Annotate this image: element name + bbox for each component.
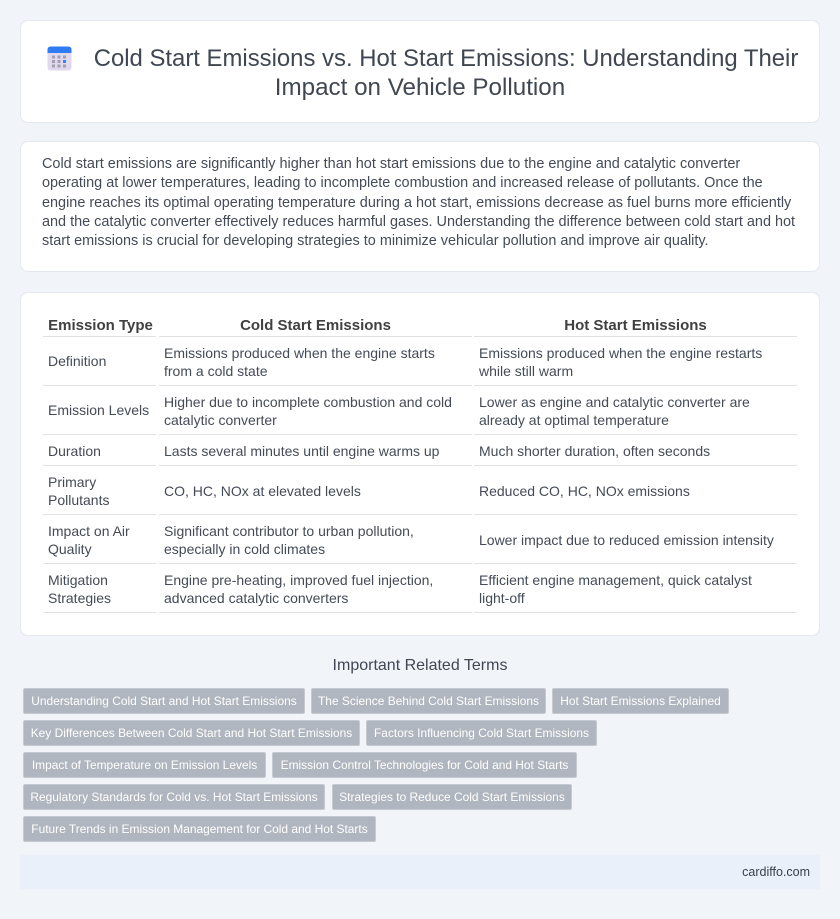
related terms tags: Strategies to Reduce Cold Start Emissions xyxy=(339,790,565,804)
panel: comparison table: Emissions produced when the engine starts xyxy=(164,345,435,361)
row: definition: Definition xyxy=(48,353,106,369)
panel: comparison table: Hot Start Emissions xyxy=(564,317,707,334)
title xyxy=(94,45,798,101)
related terms tags: Hot Start Emissions Explained xyxy=(560,694,721,708)
panel: summary text: operating at lower temperatures, leading to incomplete combustion and increased release of pollutants. Once the xyxy=(42,175,763,191)
panel: comparison table: already at optimal temperature xyxy=(479,412,669,428)
panel: comparison table: Lasts several minutes until engine warms up xyxy=(164,443,439,459)
panel: comparison table: Efficient engine management, quick catalyst xyxy=(479,572,752,588)
related terms tags xyxy=(23,688,729,842)
row: emission levels: Emission Levels xyxy=(48,402,149,418)
table header: Emission Type xyxy=(48,317,153,334)
related terms tags: The Science Behind Cold Start Emissions xyxy=(318,694,539,708)
panel: comparison table: Much shorter duration, often seconds xyxy=(479,443,710,459)
panel: comparison table: Emissions produced when the engine restarts xyxy=(479,345,762,361)
footer brand: cardiffo.com xyxy=(742,865,810,879)
panel: comparison table: Lower as engine and catalytic converter are xyxy=(479,394,750,410)
row: duration: Duration xyxy=(48,443,101,459)
row: mitigation strategies: Strategies xyxy=(48,590,111,606)
row: impact on air quality: Impact on Air xyxy=(48,523,130,539)
panel: comparison table: especially in cold climates xyxy=(164,541,325,557)
row: mitigation strategies xyxy=(48,572,111,606)
panel: summary text xyxy=(20,141,820,272)
panel: comparison table: while still warm xyxy=(479,363,573,379)
footer bar xyxy=(20,855,820,889)
row: primary pollutants xyxy=(48,474,109,508)
panel: comparison table: Engine pre-heating, improved fuel injection, xyxy=(164,572,433,588)
panel: comparison table: Higher due to incomplete combustion and cold xyxy=(164,394,452,410)
title: Impact on Vehicle Pollution xyxy=(275,74,565,101)
panel: comparison table: Lower impact due to reduced emission intensity xyxy=(479,532,774,548)
panel: comparison table: Cold Start Emissions xyxy=(240,317,391,334)
row: primary pollutants: Primary xyxy=(48,474,96,490)
panel: comparison table: CO, HC, NOx at elevated levels xyxy=(164,483,361,499)
related terms tags: Emission Control Technologies for Cold and Hot Starts xyxy=(281,758,568,772)
panel: summary text: and the catalytic converter effectively reduces harmful gases. Understanding the difference between cold start and hot xyxy=(42,214,795,230)
related terms tags: Factors Influencing Cold Start Emissions xyxy=(374,726,589,740)
title: Cold Start Emissions vs. Hot Start Emissions: Understanding Their xyxy=(94,45,798,72)
panel: title card xyxy=(20,20,820,123)
panel: comparison table: catalytic converter xyxy=(164,412,277,428)
panel: comparison table: advanced catalytic converters xyxy=(164,590,348,606)
panel: comparison table: from a cold state xyxy=(164,363,268,379)
panel: comparison table: Reduced CO, HC, NOx emissions xyxy=(479,483,690,499)
panel: comparison table: Significant contributor to urban pollution, xyxy=(164,523,414,539)
panel: comparison table: light-off xyxy=(479,590,525,606)
row: impact on air quality: Quality xyxy=(48,541,92,557)
panel: comparison table xyxy=(20,292,820,636)
related terms tags: Understanding Cold Start and Hot Start Emissions xyxy=(31,694,297,708)
related terms tags: Impact of Temperature on Emission Levels xyxy=(32,758,257,772)
related terms tags: Regulatory Standards for Cold vs. Hot Start Emissions xyxy=(30,790,318,804)
related terms tags: Future Trends in Emission Management for Cold and Hot Starts xyxy=(31,822,368,836)
row: primary pollutants: Pollutants xyxy=(48,492,109,508)
panel: summary text: start emissions is crucial for developing strategies to minimize vehicular pollution and improve air quality. xyxy=(42,233,709,249)
panel: summary text: Cold start emissions are significantly higher than hot start emissions due to the engine and catalytic converter xyxy=(42,156,740,172)
row: mitigation strategies: Mitigation xyxy=(48,572,108,588)
panel: summary text: engine reaches its optimal operating temperature during a hot start, emissions decrease as fuel burns more efficiently xyxy=(42,195,791,211)
icon: calendar xyxy=(48,46,72,70)
row: impact on air quality xyxy=(48,523,130,557)
related terms tags: Key Differences Between Cold Start and Hot Start Emissions xyxy=(31,726,352,740)
heading: related terms: Important Related Terms xyxy=(333,657,507,674)
